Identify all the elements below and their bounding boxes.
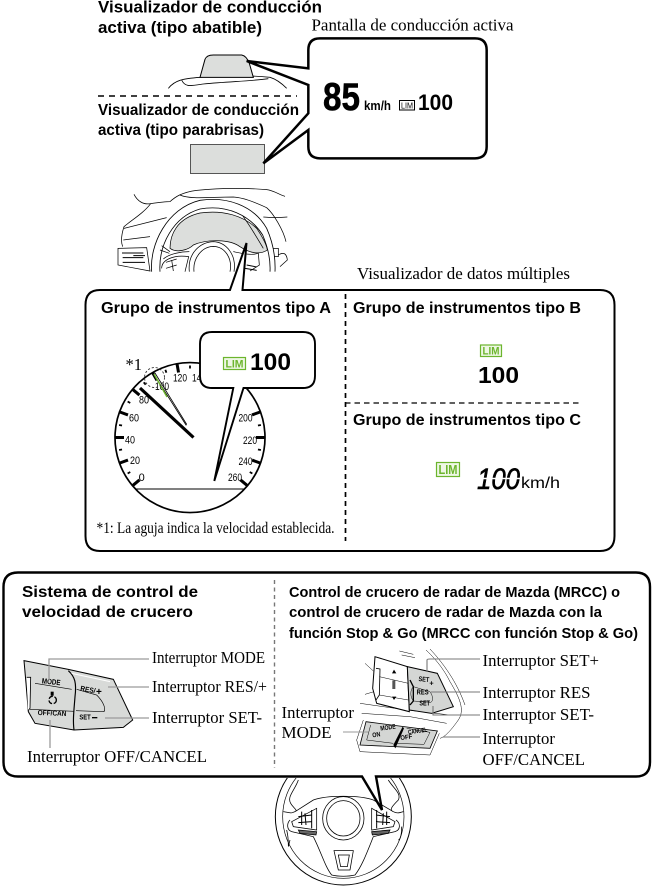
illustration: MRCC switches (right): + xyxy=(429,679,434,688)
callout: limit 100 xyxy=(200,332,315,481)
illustration: dashboard with instrument cluster xyxy=(118,188,287,272)
speedometer gauge: 100 xyxy=(155,381,169,393)
labels: left switch: Interruptor OFF/CANCEL xyxy=(27,747,207,766)
labels: right switch xyxy=(282,651,599,769)
illustration: cruise switch (left): + xyxy=(96,687,102,698)
heading: MRCC: Control de crucero de radar de Mazda (MRCC) o xyxy=(289,584,620,601)
illustration: MRCC switches (right): RES xyxy=(417,689,429,696)
labels: right switch: Interruptor SET+ xyxy=(482,651,599,670)
illustration: cruise switch (left): MODE xyxy=(41,676,61,687)
illustration: windshield display xyxy=(190,144,264,174)
speedometer gauge: 0 xyxy=(139,472,145,484)
label: Visualizador de datos múltiples: Visualizador de datos múltiples xyxy=(357,264,570,283)
illustration: MRCC switches (right) xyxy=(357,649,465,755)
set-speed needle xyxy=(154,373,186,425)
illustration: steering wheel xyxy=(274,778,412,886)
callout: active driving display xyxy=(247,38,487,163)
footnote: *1: La aguja indica la velocidad establecida. xyxy=(96,520,334,537)
type C limit badge: LIM xyxy=(438,462,458,477)
leader lines: left switch xyxy=(49,659,149,748)
type B limit badge: LIM xyxy=(482,346,500,358)
illustration: MRCC switches (right): MODE xyxy=(380,724,397,733)
leader lines: right switch xyxy=(343,659,480,737)
panel: multi-information display xyxy=(86,243,614,551)
heading: MRCC: control de crucero de radar de Mazda con la xyxy=(289,604,603,621)
speedometer gauge: 60 xyxy=(129,412,139,424)
type C unit: km/h xyxy=(521,475,560,492)
heading: type A: Grupo de instrumentos tipo A xyxy=(101,300,331,317)
type C segment value: 100 xyxy=(477,463,520,496)
divider between display types xyxy=(98,95,297,97)
limit value: 100 xyxy=(418,90,453,115)
illustration: cruise switch (left): SET xyxy=(79,712,91,721)
vertical divider xyxy=(274,580,276,768)
heading: cruise control: velocidad de crucero xyxy=(22,604,193,621)
annotation: *1: *1 xyxy=(126,355,142,374)
panel: cruise control switches xyxy=(4,572,650,810)
labels: left switch: Interruptor MODE xyxy=(152,648,265,667)
labels: right switch: OFF/CANCEL xyxy=(482,750,585,769)
labels: left switch xyxy=(27,648,267,766)
heading: tipo abatible xyxy=(98,0,322,37)
illustration: tipo abatible display xyxy=(168,55,287,88)
labels: left switch: Interruptor SET- xyxy=(152,708,262,727)
illustration: MRCC switches (right): OFF xyxy=(400,733,413,742)
labels: left switch: Interruptor RES/+ xyxy=(152,677,267,696)
speedometer gauge xyxy=(115,362,265,513)
illustration: MRCC switches (right): SET xyxy=(418,676,430,684)
speedometer gauge: 20 xyxy=(130,455,140,467)
labels: right switch: Interruptor SET- xyxy=(482,705,594,724)
speedometer gauge: 120 xyxy=(173,372,187,384)
heading: type C: Grupo de instrumentos tipo C xyxy=(353,412,581,429)
speed needle xyxy=(140,388,194,438)
type B value: 100 xyxy=(478,362,519,388)
illustration: MRCC switches (right): CANCEL xyxy=(408,727,428,736)
speed value: 85 xyxy=(323,76,360,119)
horizontal divider xyxy=(345,402,580,404)
heading: MRCC: función Stop & Go (MRCC con función Stop & Go) xyxy=(289,625,638,642)
speedometer gauge: 220 xyxy=(243,435,257,447)
illustration: MRCC switches (right): ON xyxy=(372,731,381,739)
heading: tipo abatible: activa (tipo abatible) xyxy=(98,19,262,37)
illustration: cruise switch (left) xyxy=(24,661,133,730)
heading: MRCC xyxy=(289,584,638,642)
limit value: 100 xyxy=(250,349,291,376)
speedometer gauge: 260 xyxy=(228,472,242,484)
speedometer gauge: 80 xyxy=(139,394,149,406)
speedometer gauge: 200 xyxy=(238,412,252,424)
illustration: MRCC switches (right): SET xyxy=(419,700,431,707)
speedometer gauge: 40 xyxy=(125,434,135,446)
label: Pantalla de conducción activa: Pantalla de conducción activa xyxy=(312,16,514,34)
labels: right switch: Interruptor xyxy=(482,729,555,748)
dashed marker circle xyxy=(144,368,164,388)
illustration: cruise switch (left): RES/ xyxy=(80,684,96,695)
speedometer gauge: 140 xyxy=(192,372,206,384)
labels: right switch: MODE xyxy=(282,723,332,742)
unit: km/h xyxy=(364,99,391,113)
labels: right switch: Interruptor xyxy=(282,703,354,722)
heading: cruise control xyxy=(22,584,198,621)
heading: tipo parabrisas: Visualizador de conducción xyxy=(98,102,299,119)
heading: type B: Grupo de instrumentos tipo B xyxy=(353,300,581,317)
labels: right switch: Interruptor RES xyxy=(482,683,590,702)
illustration: cruise switch (left): OFF/CAN xyxy=(38,708,67,718)
limit badge: LIM xyxy=(226,358,244,370)
vertical divider xyxy=(344,294,346,541)
heading: tipo parabrisas xyxy=(98,102,299,139)
heading: tipo parabrisas: activa (tipo parabrisas) xyxy=(98,122,264,139)
limit badge: LIM xyxy=(401,100,413,110)
speedometer gauge: 240 xyxy=(238,456,252,468)
heading: cruise control: Sistema de control de xyxy=(22,584,198,601)
